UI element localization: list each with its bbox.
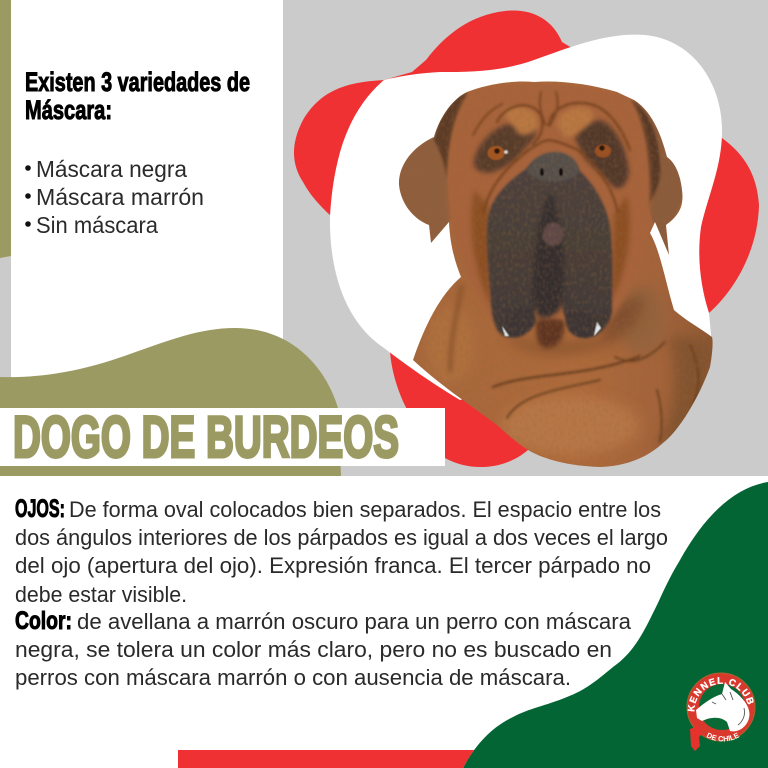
- text block: color: perros con máscara marrón o con ausencia de máscara.: [15, 665, 571, 690]
- heading: varieties: Máscara:: [25, 95, 112, 125]
- text block: ojos: debe estar visible.: [15, 582, 187, 607]
- eye: left: [488, 146, 508, 160]
- logo ribbon: [690, 726, 702, 751]
- panel: varieties: [11, 0, 283, 380]
- logo bottom text: DE CHILE: [706, 732, 740, 742]
- text block: ojos: del ojo (apertura del ojo). Expresión franca. El tercer párpado no: [15, 553, 651, 578]
- cheek shading: [471, 190, 630, 305]
- logo: Kennel Club de Chile: [686, 672, 756, 751]
- title band: [0, 405, 445, 470]
- olive side strip: [0, 0, 11, 258]
- green corner shape: [463, 482, 768, 768]
- right ear: [634, 100, 682, 255]
- eye: right: [595, 144, 611, 158]
- title: DOGO DE BURDEOS: [13, 405, 399, 470]
- photo: dog: [395, 75, 720, 475]
- lip highlight: [542, 222, 564, 246]
- text block: ojos: OJOS:: [15, 495, 65, 523]
- text block: color: Color:: [15, 607, 72, 635]
- inner mouth: [533, 195, 564, 318]
- head: [448, 82, 650, 320]
- text block: ojos: [15, 495, 668, 607]
- list: mask varieties: Sin máscara: [36, 212, 158, 238]
- text block: color: de avellana a marrón oscuro para un perro con máscara: [77, 609, 632, 634]
- chest folds: [493, 342, 698, 442]
- left shoulder seam: [450, 285, 462, 372]
- red bottom bar: [178, 750, 474, 768]
- logo dog head: [696, 682, 750, 731]
- under-jaw shadow: [505, 295, 645, 353]
- olive wave shape: [0, 328, 341, 476]
- red blob behind dog: [294, 10, 759, 467]
- text block: color: negra, se tolera un color más claro, pero no es buscado en: [15, 637, 612, 662]
- chest highlights: [504, 397, 638, 452]
- fur grain: [438, 100, 660, 454]
- logo top text: KENNEL CLUB: [688, 677, 754, 712]
- text block: ojos: De forma oval colocados bien separados. El espacio entre los: [69, 497, 661, 522]
- left ear: [399, 92, 467, 243]
- forehead wrinkles: [473, 92, 630, 212]
- background: white lower area: [0, 476, 768, 768]
- list: mask varieties: Máscara negra: [36, 156, 187, 182]
- background: gray upper area: [0, 0, 768, 476]
- forehead curls: [502, 107, 538, 135]
- text block: color: [15, 607, 632, 690]
- fur base: [395, 75, 720, 475]
- logo ring: [687, 673, 755, 741]
- right flank shadow: [658, 334, 712, 445]
- nose: [527, 152, 579, 182]
- heading: varieties: Existen 3 variedades de: [25, 67, 250, 97]
- jowl tips: [509, 312, 538, 340]
- list: mask varieties: Máscara marrón: [36, 184, 204, 210]
- white blob behind dog: [330, 35, 722, 400]
- eye sockets: [474, 123, 536, 173]
- text block: ojos: dos ángulos interiores de los párpados es igual a dos veces el largo: [15, 525, 668, 550]
- list: mask varieties: [25, 156, 210, 238]
- muzzle mask: [487, 156, 612, 338]
